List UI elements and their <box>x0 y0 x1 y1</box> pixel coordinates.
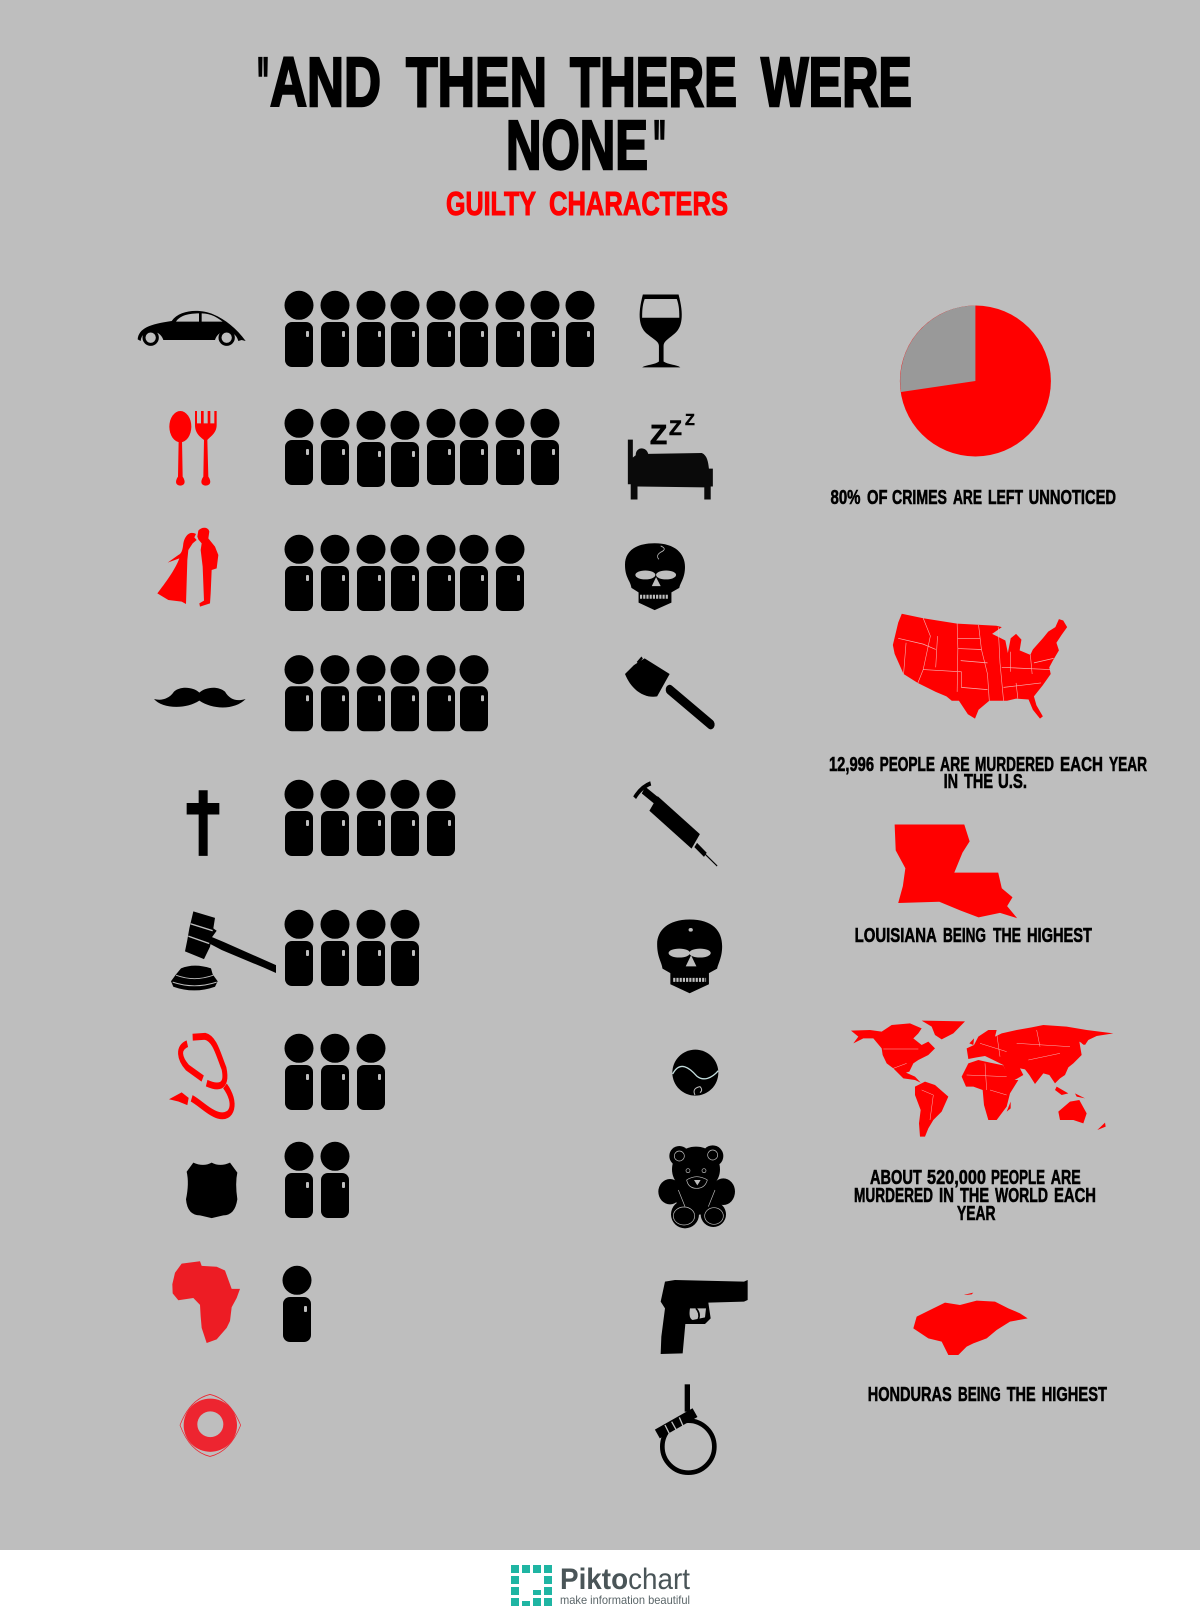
caption: unnoticed crimes: 80% <box>830 487 861 509</box>
title: NONE <box>506 106 648 184</box>
icon: spoon and fork <box>169 411 217 486</box>
caption: world murders: 520,000 <box>927 1167 986 1189</box>
caption: world murders: YEAR <box>957 1203 996 1225</box>
caption: world murders: ABOUT <box>870 1167 922 1189</box>
caption: world murders: THE <box>960 1185 989 1207</box>
caption: honduras <box>868 1384 1107 1406</box>
icon: cross <box>187 790 219 856</box>
piktochart logo: make information beautiful <box>560 1593 690 1607</box>
icon: pistol <box>661 1280 748 1354</box>
caption: us murders: IN <box>944 771 958 793</box>
piktochart logo <box>511 1563 691 1607</box>
caption: world murders: EACH <box>1054 1185 1096 1207</box>
caption: world murders: WORLD <box>995 1185 1048 1207</box>
caption: honduras: HIGHEST <box>1042 1384 1107 1406</box>
icon: teddy bear <box>658 1145 735 1228</box>
caption: unnoticed crimes: CRIMES <box>892 487 947 509</box>
people row: 2 figures <box>284 1142 350 1218</box>
icon: car <box>138 311 246 344</box>
icon: skull <box>657 920 722 993</box>
icon: gavel <box>171 911 276 990</box>
caption: us murders: ARE <box>940 754 970 776</box>
icon: sleeping in bed: Z <box>650 419 667 450</box>
icon: moustache <box>154 688 246 707</box>
caption: unnoticed crimes: ARE <box>953 487 982 509</box>
caption: world murders: PEOPLE <box>991 1167 1045 1189</box>
map: united states <box>893 614 1067 719</box>
caption: world murders: ARE <box>1051 1167 1081 1189</box>
caption: unnoticed crimes: OF <box>867 487 888 509</box>
map: world <box>851 1021 1113 1137</box>
caption: world murders <box>854 1167 1096 1225</box>
caption: louisiana: BEING <box>943 925 986 947</box>
icon: syringe <box>635 783 717 866</box>
caption: unnoticed crimes: LEFT <box>988 487 1023 509</box>
caption: honduras: HONDURAS <box>868 1384 952 1406</box>
people row: 4 figures <box>284 910 420 986</box>
caption: unnoticed crimes: UNNOTICED <box>1029 487 1116 509</box>
caption: us murders: MURDERED <box>975 754 1054 776</box>
icon: cracked skull <box>625 543 685 610</box>
icon: kissing couple <box>157 528 218 607</box>
title: THEN <box>406 43 547 121</box>
caption: unnoticed crimes <box>830 487 1116 509</box>
map: honduras <box>913 1293 1028 1355</box>
subtitle: CHARACTERS <box>549 185 728 222</box>
map: louisiana <box>895 824 1017 918</box>
people row: 9 figures <box>284 291 594 367</box>
caption: louisiana: LOUISIANA <box>855 925 937 947</box>
people row: 7 figures <box>284 535 524 611</box>
icon: sleeping in bed <box>628 412 713 499</box>
caption: louisiana: HIGHEST <box>1027 925 1092 947</box>
caption: us murders: U.S. <box>998 771 1027 793</box>
caption: us murders: THE <box>964 771 993 793</box>
icon: police badge <box>186 1163 237 1218</box>
people row: 3 figures <box>284 1034 386 1110</box>
icon: hatchet <box>625 658 711 724</box>
people row: 8 figures <box>284 409 560 487</box>
caption: honduras: THE <box>1007 1384 1036 1406</box>
caption: us murders <box>829 754 1147 793</box>
title: AND <box>270 43 381 121</box>
icon: ball <box>672 1050 718 1096</box>
caption: us murders: 12,996 <box>829 754 874 776</box>
icon: life ring <box>180 1394 241 1456</box>
piktochart logo: Piktochart <box>560 1563 691 1596</box>
caption: us murders: PEOPLE <box>880 754 935 776</box>
title: THERE <box>570 43 737 121</box>
icon: noose <box>657 1384 714 1473</box>
icon: sleeping in bed: Z <box>669 417 682 440</box>
icon: stethoscope <box>169 1036 232 1116</box>
caption: honduras: BEING <box>958 1384 1001 1406</box>
icon: wine glass <box>640 295 682 367</box>
caption: world murders: MURDERED <box>854 1185 933 1207</box>
caption: us murders: EACH <box>1060 754 1103 776</box>
caption: us murders: YEAR <box>1109 754 1147 776</box>
subtitle: GUILTY <box>446 185 536 222</box>
title: " <box>257 43 269 121</box>
caption: louisiana <box>855 925 1092 947</box>
people row: 5 figures <box>284 780 456 856</box>
footer bar <box>0 1550 1200 1623</box>
subtitle <box>446 185 728 222</box>
title <box>257 43 912 184</box>
caption: world murders: IN <box>939 1185 954 1207</box>
title: " <box>653 106 666 184</box>
people row: 6 figures <box>284 655 488 731</box>
title: WERE <box>761 43 912 121</box>
icon: sleeping in bed: Z <box>685 412 695 429</box>
pie chart <box>900 306 1051 456</box>
people row: 1 figure <box>282 1266 312 1342</box>
icon: africa <box>172 1261 240 1343</box>
caption: louisiana: THE <box>993 925 1021 947</box>
